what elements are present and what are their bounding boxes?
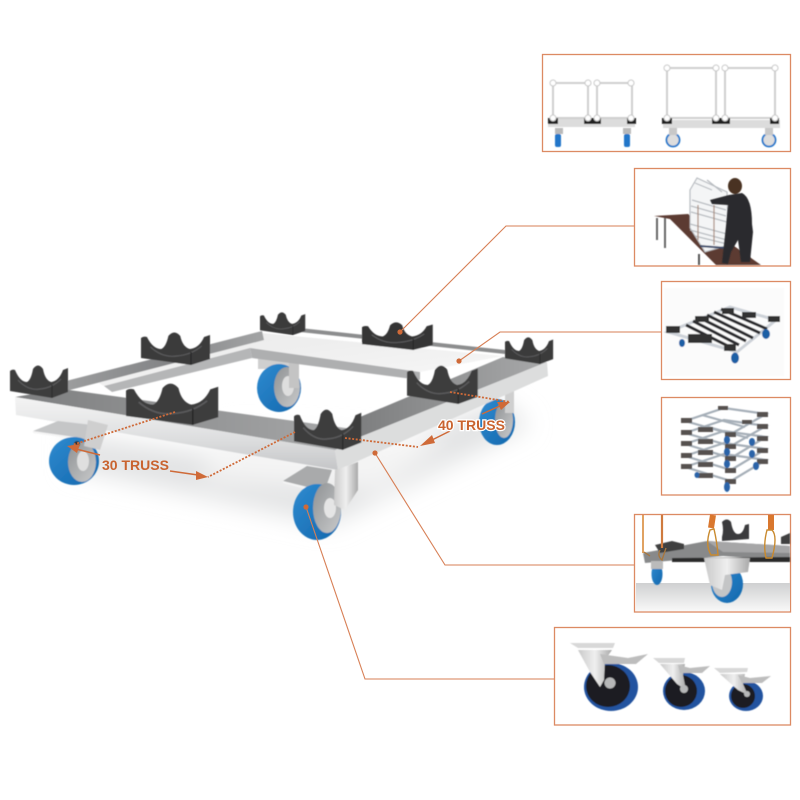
back-left wheel — [257, 355, 301, 412]
narrow view — [548, 80, 636, 147]
truss saddle 1 — [10, 366, 68, 398]
truss saddle 5 — [362, 322, 433, 350]
truss saddle 8 — [294, 410, 361, 450]
wide view — [662, 65, 780, 146]
truss saddle 3 — [126, 384, 218, 425]
truss saddle 6 — [505, 337, 553, 364]
person pushing — [710, 178, 753, 264]
dolly with bars — [664, 288, 784, 376]
large caster — [570, 643, 648, 711]
lifting straps — [643, 515, 775, 560]
panel: loading photo — [634, 168, 790, 266]
table and ramp — [654, 214, 761, 265]
panel: deck with bars photo — [662, 282, 790, 380]
right rear wheel — [479, 368, 525, 445]
frame back bar — [300, 328, 505, 354]
leader line to casters photo — [303, 504, 554, 679]
floor shadow — [70, 400, 530, 525]
front rail top — [15, 389, 360, 451]
label: 40 truss: 40 TRUSS — [438, 417, 505, 433]
front-left caster — [33, 420, 108, 485]
label: 30 truss: 30 TRUSS — [102, 457, 169, 473]
leader line to deck photo — [456, 332, 661, 364]
centre plate — [97, 333, 503, 392]
panel: truss width fit — [542, 54, 790, 152]
leader line to lifting photo — [372, 450, 634, 565]
40 truss dimension — [345, 392, 510, 447]
small caster — [714, 668, 771, 711]
dolly close-up — [643, 520, 790, 603]
medium caster — [653, 658, 710, 710]
panel: stacked dollies photo — [662, 398, 790, 495]
panel: lifting points photo — [634, 514, 790, 612]
frame left rail — [66, 331, 264, 391]
panel: caster sizes photo — [554, 628, 790, 725]
truss saddle 4 — [260, 312, 305, 335]
stack of five dollies — [681, 406, 768, 492]
30 truss dimension — [67, 412, 295, 480]
stacked dollies — [690, 178, 729, 252]
truss saddle 7 — [407, 366, 478, 404]
right rail — [335, 357, 548, 470]
main product: truss dolly — [10, 312, 553, 540]
truss saddle 2 — [141, 332, 210, 365]
leader line to stacking photo — [397, 226, 634, 335]
floor — [636, 583, 790, 611]
front-right caster — [283, 462, 358, 540]
front rail face — [15, 397, 338, 470]
